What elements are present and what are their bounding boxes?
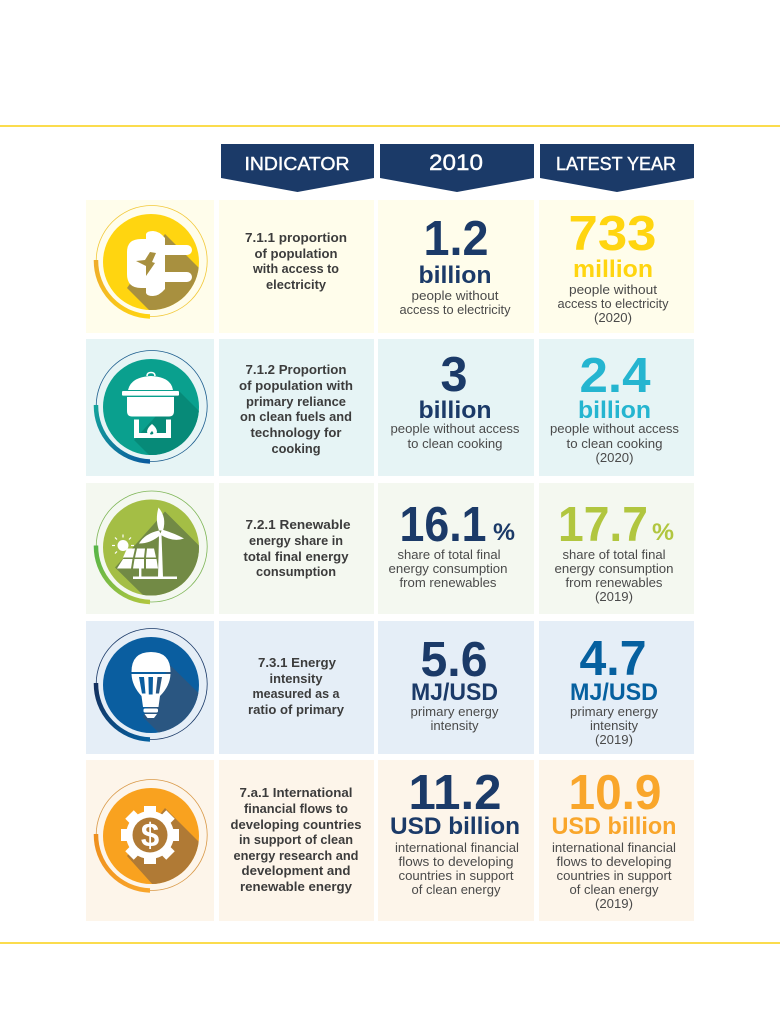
row 4: energy intensity [86,621,694,765]
2010 value: 16.1 percent: from renewables [400,576,496,590]
latest value: 2.4 billion: to clean cooking [566,437,663,451]
2010 value: 16.1 percent: 16.1 [400,498,486,552]
latest value: 733 million: 733 [568,207,656,261]
latest value: 4.7 MJ/USD [539,621,694,754]
latest value: 4.7 MJ/USD: MJ/USD [570,679,658,706]
indicator panel 7.2.1: energy share in [249,534,343,548]
latest value: 733 million: million [573,256,653,283]
row 5: financial flows [86,760,694,921]
indicator panel 7.1.1: with access to [252,262,339,276]
2010 value: 5.6 MJ/USD: 5.6 [420,633,488,687]
latest value: 4.7 MJ/USD: 4.7 [580,632,646,686]
latest value: 17.7 percent: share of total final [562,548,666,562]
latest value: 4.7 MJ/USD: intensity [590,719,639,733]
2010 value: 11.2 USD billion: international financial [395,841,519,855]
latest value: 17.7 percent: (2019) [595,590,633,604]
indicator panel 7.a.1: 7.a.1 International [240,786,352,800]
indicator panel 7.3.1: intensity [270,672,323,686]
indicator panel 7.3.1: 7.3.1 Energy [258,656,336,670]
column header: indicator [221,144,374,192]
2010 value: 11.2 USD billion: 11.2 [408,766,502,820]
indicator panel 7.a.1: financial flows to [244,802,348,816]
latest value: 733 million: access to electricity [558,297,669,311]
2010 value: 3 billion: people without access [390,422,520,436]
latest value: 17.7 percent: 17.7 [558,498,648,552]
icon panel: cooking pot [86,339,214,476]
indicator panel 7.1.2: of population with [239,379,353,393]
icon panel: gear with dollar: $ [141,816,159,854]
indicator panel 7.1.2: cooking [272,442,320,456]
indicator panel 7.1.2: technology for [250,426,342,440]
indicator panel 7.2.1: total final energy [244,550,349,564]
latest value: 10.9 USD billion: (2019) [595,897,633,911]
latest value: 10.9 USD billion: USD billion [552,813,676,840]
indicator panel 7.2.1: 7.2.1 Renewable [246,518,351,532]
latest value: 733 million: (2020) [594,311,632,325]
latest value: 733 million [539,200,694,333]
latest value: 10.9 USD billion: countries in support [556,869,672,883]
2010 value: 11.2 USD billion: countries in support [398,869,514,883]
latest value: 10.9 USD billion: 10.9 [568,766,662,820]
2010 value: 5.6 MJ/USD: intensity [430,719,479,733]
latest value: 733 million: people without [569,283,658,297]
indicator panel 7.1.2: on clean fuels and [240,410,352,424]
2010 value: 11.2 USD billion: flows to developing [398,855,514,869]
icon panel: gear with dollar [86,760,214,921]
column header: latest year [540,144,694,192]
2010 value: 16.1 percent: % [493,519,515,546]
latest value: 10.9 USD billion: flows to developing [556,855,672,869]
2010 value: 16.1 percent [378,483,534,614]
indicator panel 7.1.2 [219,339,374,476]
indicator panel 7.1.2: primary reliance [246,395,346,409]
column header: 2010: 2010 [429,150,483,175]
indicator panel 7.1.1: electricity [266,278,326,292]
2010 value: 3 billion [378,339,534,476]
2010 value: 11.2 USD billion [378,760,534,921]
latest value: 4.7 MJ/USD: primary energy [570,705,659,719]
indicator panel 7.1.1: of population [254,247,338,261]
indicator panel 7.1.1 [219,200,374,333]
2010 value: 3 billion: 3 [440,348,468,402]
latest value: 4.7 MJ/USD: (2019) [595,733,633,747]
icon panel: wind turbine and solar panel [86,483,214,614]
latest value: 2.4 billion: people without access [550,422,679,436]
latest value: 10.9 USD billion [539,760,694,921]
latest value: 17.7 percent: from renewables [566,576,662,590]
latest value: 17.7 percent: energy consumption [554,562,674,576]
row 2: clean cooking [86,339,694,487]
latest value: 2.4 billion: billion [578,397,651,424]
latest value: 2.4 billion: 2.4 [580,349,650,403]
2010 value: 11.2 USD billion: of clean energy [412,883,501,897]
column header: 2010 [380,144,534,192]
icon panel: light bulb [86,621,214,754]
2010 value: 3 billion: billion [418,397,492,424]
2010 value: 1.2 billion: billion [418,262,492,289]
2010 value: 5.6 MJ/USD: MJ/USD [411,679,498,706]
indicator panel 7.3.1 [219,621,374,754]
indicator panel 7.a.1: renewable energy [240,880,352,894]
icon panel: plug [86,200,214,333]
2010 value: 11.2 USD billion: USD billion [390,813,520,840]
column header: indicator: INDICATOR [244,154,350,174]
row 3: renewable energy [86,483,694,628]
2010 value: 3 billion: to clean cooking [408,437,503,451]
2010 value: 16.1 percent: share of total final [398,548,500,562]
2010 value: 5.6 MJ/USD: primary energy [410,705,499,719]
indicator panel 7.1.1: 7.1.1 proportion [245,231,347,245]
latest value: 2.4 billion: (2020) [596,451,634,465]
row 1: electricity [86,200,694,342]
2010 value: 1.2 billion: people without [412,289,499,303]
indicator panel 7.a.1: development and [242,864,350,878]
latest value: 10.9 USD billion: international financial [552,841,676,855]
latest value: 10.9 USD billion: of clean energy [570,883,659,897]
latest value: 2.4 billion [539,339,694,476]
2010 value: 16.1 percent: energy consumption [388,562,508,576]
2010 value: 1.2 billion: 1.2 [424,212,488,266]
2010 value: 1.2 billion [378,200,534,333]
indicator panel 7.1.2: 7.1.2 Proportion [246,363,346,377]
latest value: 17.7 percent: % [652,519,674,546]
indicator panel 7.3.1: ratio of primary [248,703,344,717]
indicator panel 7.2.1: consumption [256,565,336,579]
indicator panel 7.2.1 [219,483,374,614]
indicator panel 7.a.1 [219,760,374,921]
2010 value: 1.2 billion: access to electricity [400,303,511,317]
indicator panel 7.a.1: in support of clean [239,833,353,847]
latest value: 17.7 percent [539,483,694,614]
indicator panel 7.a.1: developing countries [230,818,362,832]
indicator panel 7.3.1: measured as a [252,687,341,701]
indicator panel 7.a.1: energy research and [234,849,358,863]
2010 value: 5.6 MJ/USD [378,621,534,754]
column header: latest year: LATEST YEAR [556,154,676,174]
